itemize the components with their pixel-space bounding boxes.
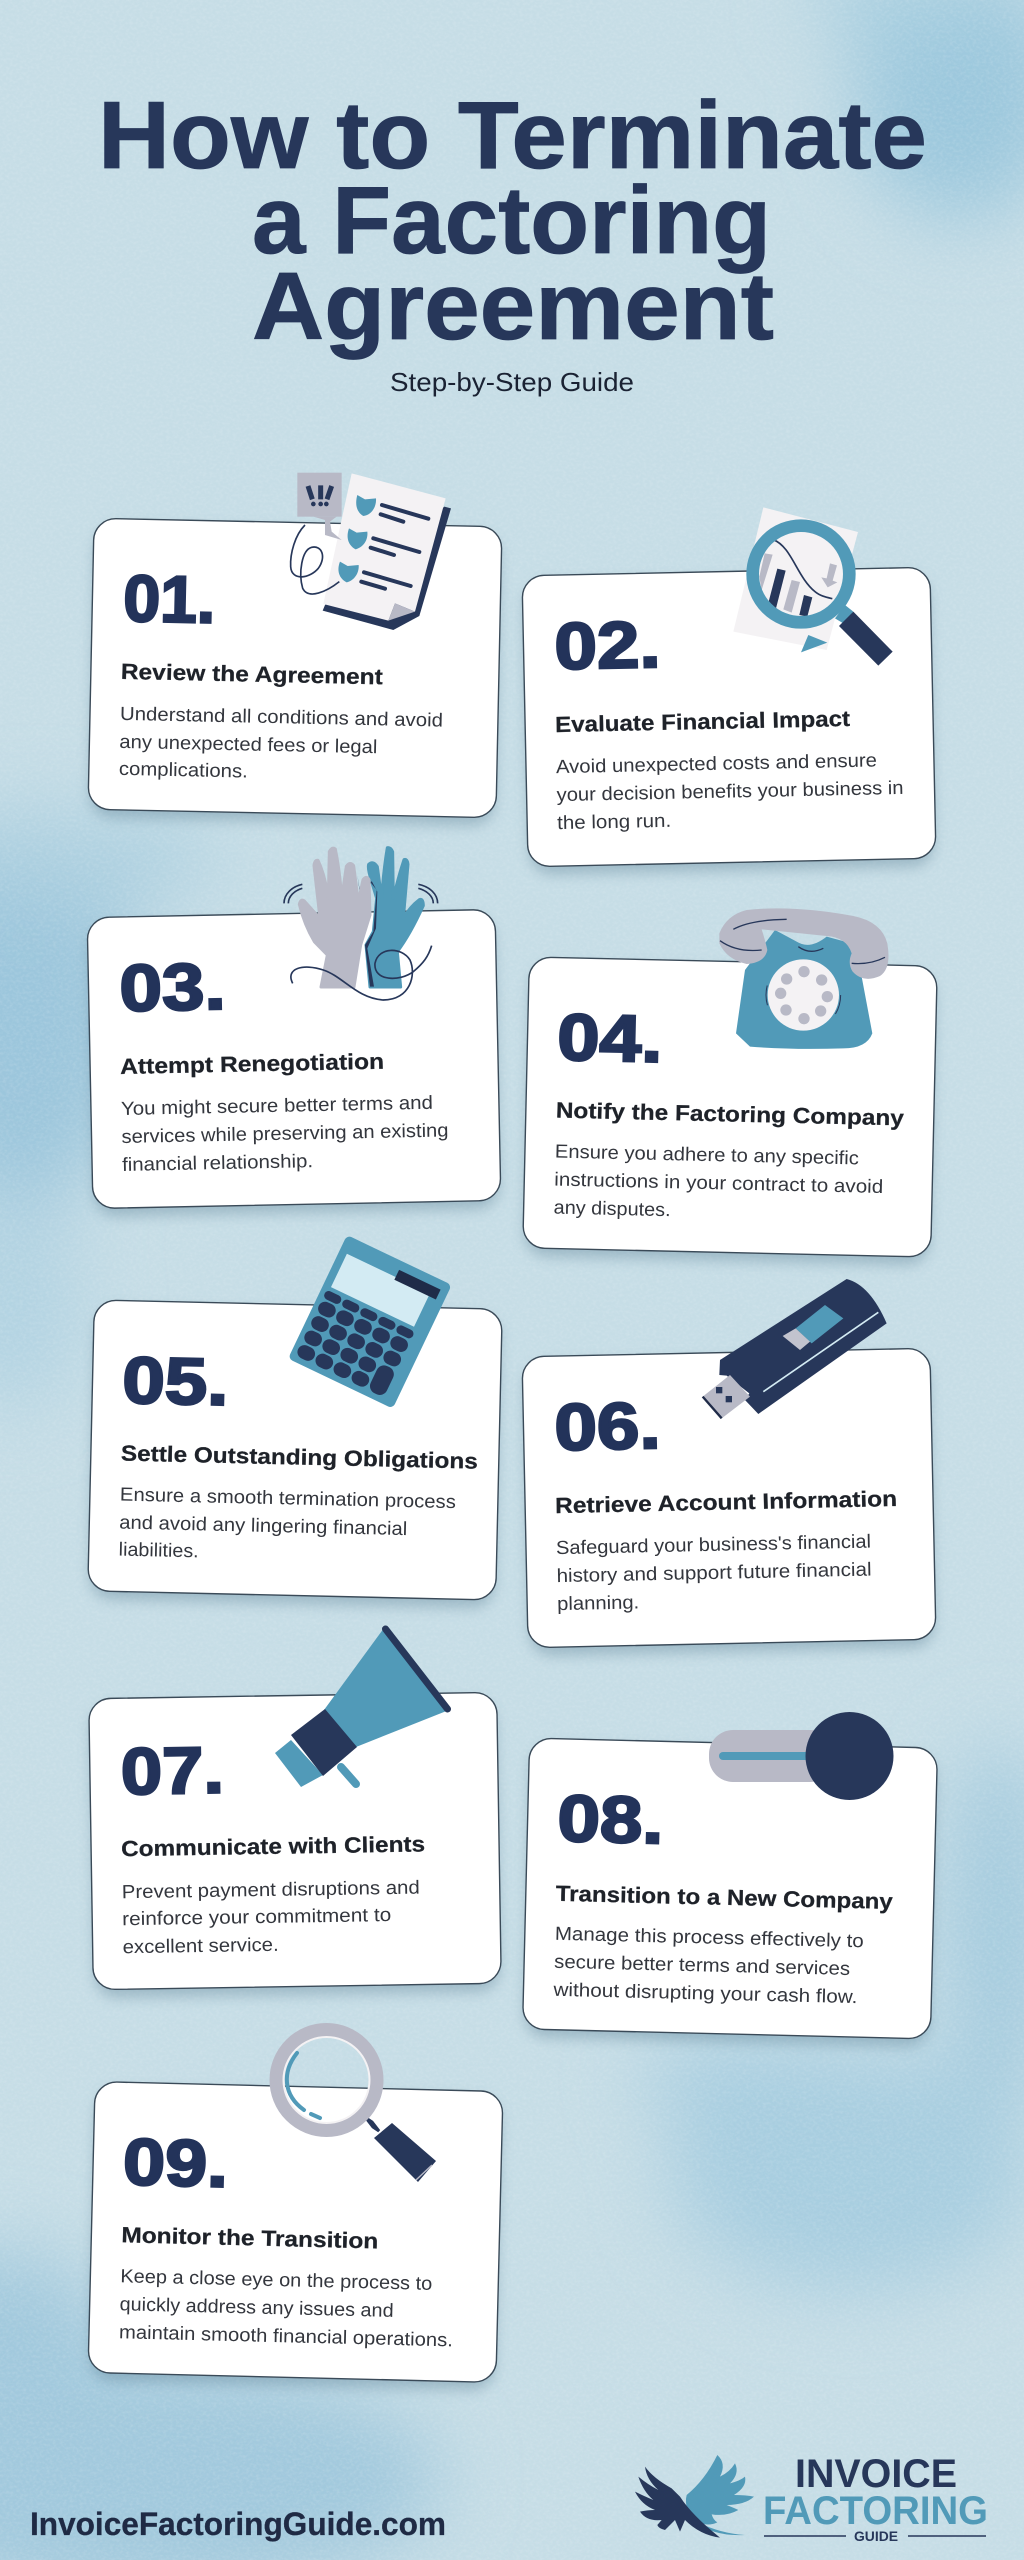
subtitle: Step-by-Step Guide <box>390 367 634 397</box>
body 6: Safeguard your business's financial <box>556 1532 871 1559</box>
heading 6: Retrieve Account Information <box>555 1486 897 1518</box>
icon: two hands <box>284 848 438 1000</box>
logo wordmark: GUIDE <box>854 2528 898 2544</box>
logo wordmark: INVOICE <box>795 2452 957 2496</box>
card 5 background <box>88 1300 502 1600</box>
panel: step 5 <box>88 1235 502 1608</box>
body 6 <box>556 1532 872 1615</box>
title: How to Terminate <box>98 82 927 189</box>
icon: rotary telephone <box>719 908 888 1049</box>
icon: document checklist <box>291 473 451 630</box>
card 1 background <box>88 518 502 818</box>
panel: step 6 <box>522 1279 936 1656</box>
body 3 <box>121 1092 449 1176</box>
body 5: Ensure a smooth termination process <box>120 1485 456 1513</box>
heading 1: Review the Agreement <box>121 659 384 689</box>
card 2 background <box>522 567 936 867</box>
heading 9: Monitor the Transition <box>121 2222 379 2254</box>
body 6: planning. <box>557 1592 639 1615</box>
step number 04: 04. <box>557 1000 663 1076</box>
heading 3: Attempt Renegotiation <box>120 1049 384 1079</box>
body 8 <box>552 1924 864 2008</box>
body 3: financial relationship. <box>122 1151 313 1176</box>
step number 02: 02. <box>554 607 661 683</box>
body 3: You might secure better terms and <box>121 1093 433 1120</box>
card 3 background <box>87 909 501 1209</box>
logo wordmark <box>763 2452 988 2544</box>
heading 7: Communicate with Clients <box>121 1831 425 1861</box>
step number 09: 09. <box>122 2124 229 2201</box>
panel: step 7 <box>89 1628 501 1998</box>
body 1: Understand all conditions and avoid <box>120 704 443 732</box>
heading 8: Transition to a New Company <box>556 1881 894 1914</box>
icon: megaphone <box>275 1628 449 1787</box>
heading 2: Evaluate Financial Impact <box>555 706 851 737</box>
logo wordmark: FACTORING <box>763 2489 988 2533</box>
step number 08: 08. <box>557 1781 665 1857</box>
body 9: maintain smooth financial operations. <box>119 2322 453 2351</box>
card 7 background <box>89 1692 501 1990</box>
step number 03: 03. <box>119 949 226 1025</box>
body 8: without disrupting your cash flow. <box>552 1980 858 2008</box>
body 4: instructions in your contract to avoid <box>554 1170 883 1198</box>
body 2: your decision benefits your business in <box>556 778 904 806</box>
logo <box>635 2452 988 2544</box>
step number 06: 06. <box>554 1388 661 1464</box>
heading 5: Settle Outstanding Obligations <box>121 1441 478 1474</box>
step number 07: 07. <box>120 1733 224 1808</box>
body 6: history and support future financial <box>556 1560 872 1587</box>
logo bird <box>635 2455 754 2538</box>
body 7: Prevent payment disruptions and <box>122 1878 420 1903</box>
footer website: InvoiceFactoringGuide.com <box>30 2506 446 2542</box>
panel: step 3 <box>87 848 501 1217</box>
step number 05: 05. <box>122 1343 229 1419</box>
body 7: excellent service. <box>122 1935 279 1958</box>
body 9: quickly address any issues and <box>119 2294 394 2322</box>
body 7: reinforce your commitment to <box>122 1905 391 1930</box>
icon: magnifying glass <box>276 2030 436 2182</box>
title: a Factoring <box>252 167 771 274</box>
body 4 <box>553 1142 884 1226</box>
panel: step 2 <box>522 507 936 875</box>
icon: magnifier over chart <box>733 507 893 666</box>
card 6 background <box>522 1348 936 1648</box>
panel: step 8 <box>522 1712 937 2047</box>
body 4: any disputes. <box>553 1198 671 1221</box>
body 2 <box>556 750 904 834</box>
icon: USB drive <box>703 1279 887 1418</box>
heading 4: Notify the Factoring Company <box>556 1098 905 1130</box>
card 9 background <box>88 2082 503 2382</box>
body 2: Avoid unexpected costs and ensure <box>556 750 877 778</box>
body 3: services while preserving an existing <box>121 1120 449 1148</box>
title <box>98 82 927 360</box>
card 4 background <box>523 957 937 1257</box>
body 9 <box>119 2266 455 2351</box>
body 5 <box>118 1485 456 1568</box>
panel: step 4 <box>523 908 937 1265</box>
body 7 <box>122 1878 421 1958</box>
body 8: secure better terms and services <box>554 1952 850 1980</box>
icon: calculator <box>288 1235 452 1409</box>
body 8: Manage this process effectively to <box>555 1924 864 1952</box>
step number 01: 01. <box>123 561 216 637</box>
body 1: complications. <box>119 759 248 783</box>
icon: toggle switch <box>709 1712 894 1800</box>
body 5: liabilities. <box>118 1540 199 1562</box>
body 2: the long run. <box>557 811 671 834</box>
body 4: Ensure you adhere to any specific <box>555 1142 859 1169</box>
body 9: Keep a close eye on the process to <box>120 2266 433 2295</box>
body 1: any unexpected fees or legal <box>119 732 378 758</box>
title: Agreement <box>252 253 774 360</box>
card 8 background <box>523 1738 937 2039</box>
panel: step 9 <box>88 2030 503 2390</box>
panel: step 1 <box>88 473 502 826</box>
body 5: and avoid any lingering financial <box>119 1513 407 1540</box>
body 1 <box>119 704 443 787</box>
